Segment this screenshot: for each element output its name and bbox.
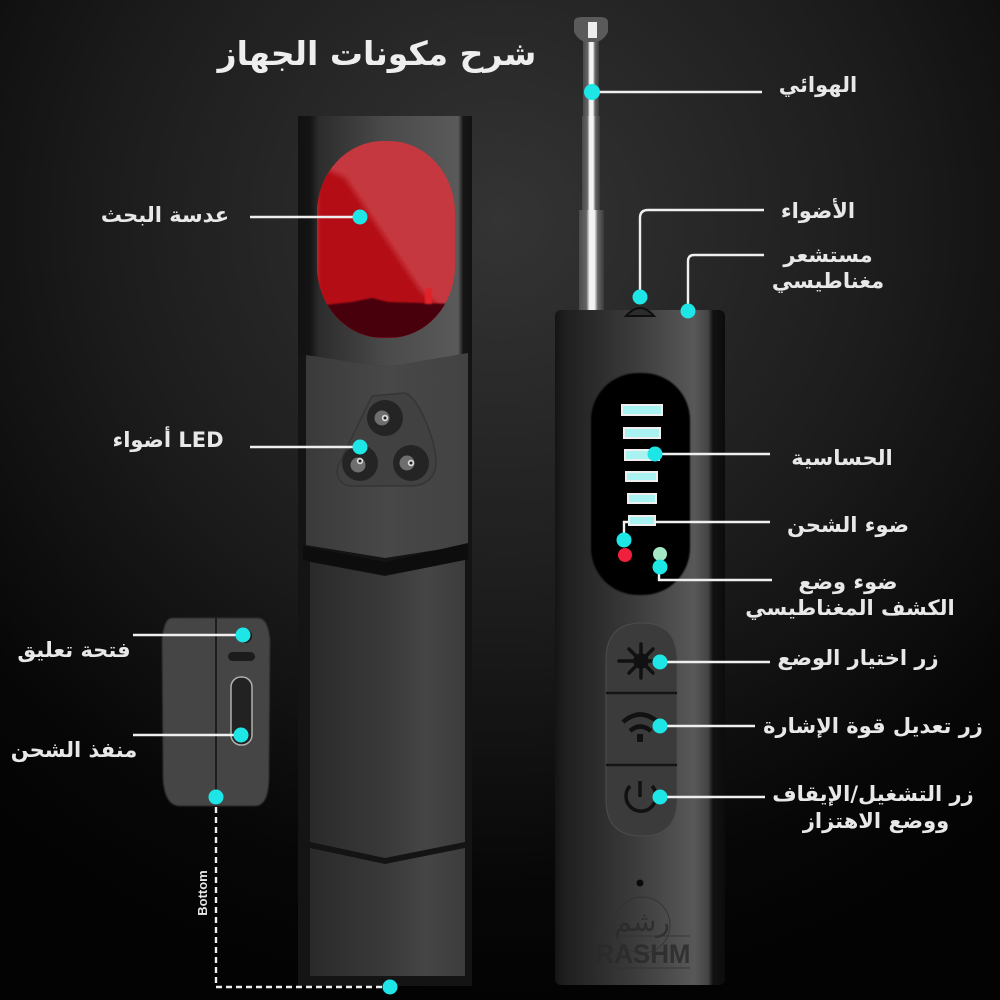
LED triangle mount <box>337 393 436 486</box>
logo watermark <box>596 897 690 969</box>
callout: bottom dashed connector <box>208 790 398 994</box>
callout: lights <box>632 210 764 304</box>
magnetic mode light <box>653 547 667 561</box>
sensitivity bars <box>622 405 662 525</box>
button panel <box>606 623 677 836</box>
LED 2 <box>342 445 378 481</box>
label: hanging hole: فتحة تعليق <box>17 638 131 662</box>
device: front view with search lens <box>298 116 472 986</box>
label: sensitivity: الحساسية <box>791 446 893 470</box>
charging port <box>231 677 252 745</box>
top housing <box>298 116 472 367</box>
logo watermark: رشم <box>614 905 670 938</box>
label: magnetic sensor: مستشعر <box>782 243 873 267</box>
callout: antenna <box>584 84 762 100</box>
hanging hole <box>238 629 252 643</box>
logo watermark: RASHM <box>596 939 690 969</box>
label: charging port: منفذ الشحن <box>11 738 137 762</box>
title: شرح مكونات الجهاز <box>216 34 536 74</box>
callout: signal button <box>652 718 755 734</box>
label: search lens: عدسة البحث <box>101 203 229 227</box>
callout: charging port <box>133 728 248 742</box>
middle LED panel <box>306 353 468 558</box>
label: mode button: زر اختيار الوضع <box>777 646 939 670</box>
callout: power button <box>652 790 765 804</box>
device: bottom view <box>162 618 270 806</box>
callout: hanging hole <box>133 628 250 642</box>
callout: mode button <box>652 654 770 670</box>
microphone hole <box>636 880 644 886</box>
device: sensor unit <box>555 308 725 985</box>
label: magnetic detection light: ضوء وضع <box>798 570 898 594</box>
antenna <box>574 17 608 316</box>
LED 1 <box>367 400 403 436</box>
label: bottom: Bottom <box>195 870 210 916</box>
icon: wifi signal <box>623 714 658 742</box>
label: signal button: زر تعديل قوة الإشارة <box>763 714 983 738</box>
label: power button line 2: ووضع الاهتزاز <box>802 809 949 833</box>
callout: LED lights <box>250 440 368 454</box>
label: magnetic detection light line 2: الكشف المغناطيسي <box>745 596 955 620</box>
lower grip <box>310 560 465 860</box>
label: LED lights: LED أضواء <box>112 425 224 452</box>
seam lower <box>310 842 465 864</box>
icon: mode star <box>619 644 659 678</box>
seam upper <box>303 543 468 575</box>
top ridge <box>626 308 654 316</box>
callout: charging light <box>616 522 770 548</box>
LED 3 <box>393 445 429 481</box>
icon: power <box>626 781 656 811</box>
callout: search lens <box>250 210 368 224</box>
label: power button: زر التشغيل/الإيقاف <box>772 782 974 806</box>
label: magnetic sensor line 2: مغناطيسي <box>772 269 884 293</box>
display window <box>591 373 690 595</box>
label: charging light: ضوء الشحن <box>787 513 909 537</box>
label: antenna: الهوائي <box>779 73 857 97</box>
charging light <box>618 548 632 562</box>
label: lights: الأضواء <box>781 197 855 223</box>
callout: magnetic sensor <box>680 255 764 318</box>
bottom grip <box>310 848 465 976</box>
callout: magnetic detection light <box>652 560 772 580</box>
search lens <box>317 141 455 338</box>
callout: sensitivity <box>648 446 770 462</box>
